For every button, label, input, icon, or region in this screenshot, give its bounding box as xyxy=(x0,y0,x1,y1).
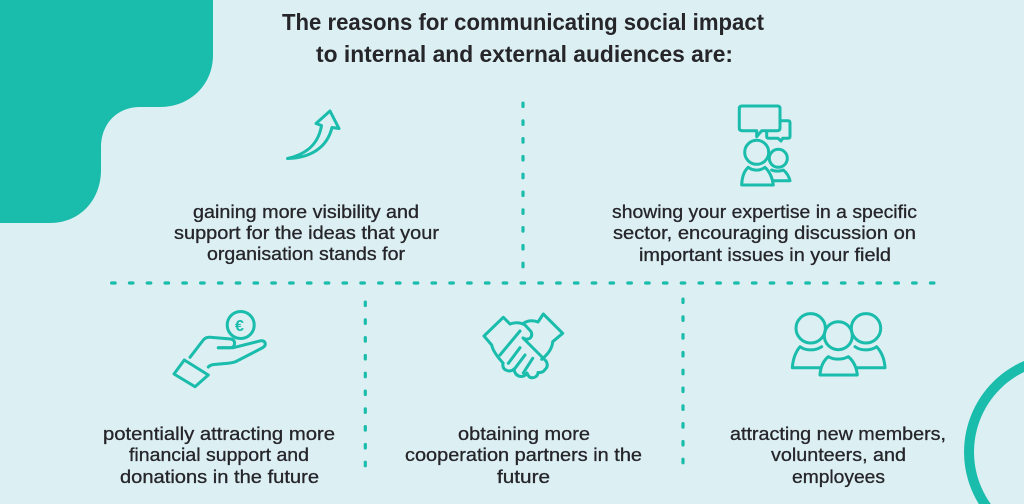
panel: new members xyxy=(730,314,946,487)
panel: expertise xyxy=(612,106,917,265)
icon: group of three people xyxy=(792,314,885,375)
text: visibility: organisation stands for xyxy=(207,243,405,264)
text: new members: attracting new members, xyxy=(730,423,946,444)
title xyxy=(282,9,764,67)
text: visibility: gaining more visibility and xyxy=(193,201,419,222)
text: new members: volunteers, and xyxy=(771,444,906,465)
decorative teal ring xyxy=(964,361,1024,504)
text: cooperation partners: cooperation partners in the xyxy=(405,444,642,465)
icon: rising arrow xyxy=(288,111,339,158)
text: new members: employees xyxy=(792,466,885,487)
icon: handshake xyxy=(484,314,563,378)
text: expertise xyxy=(612,201,917,265)
text: financial support: financial support and xyxy=(129,444,309,465)
title: to internal and external audiences are: xyxy=(316,41,733,67)
text: visibility: support for the ideas that your xyxy=(174,222,439,243)
panel: cooperation partners xyxy=(405,314,642,487)
title: The reasons for communicating social impact xyxy=(282,9,764,35)
text: cooperation partners: future xyxy=(497,466,550,487)
text: expertise: sector, encouraging discussion on xyxy=(613,222,916,243)
panel: financial support xyxy=(103,312,335,487)
text: expertise: important issues in your field xyxy=(639,244,891,265)
icon: hand with euro coin: € xyxy=(235,318,244,335)
icon: hand with euro coin xyxy=(174,312,265,387)
text: financial support xyxy=(103,423,335,487)
icon: people talking xyxy=(739,106,790,185)
text: financial support: potentially attracting more xyxy=(103,423,335,444)
text: cooperation partners xyxy=(405,423,642,487)
text: new members xyxy=(730,423,946,487)
text: visibility xyxy=(174,201,439,264)
text: cooperation partners: obtaining more xyxy=(458,423,590,444)
decorative teal corner shape xyxy=(0,0,213,223)
text: expertise: showing your expertise in a specific xyxy=(612,201,917,222)
text: financial support: donations in the future xyxy=(120,466,319,487)
panel: visibility xyxy=(174,111,439,264)
